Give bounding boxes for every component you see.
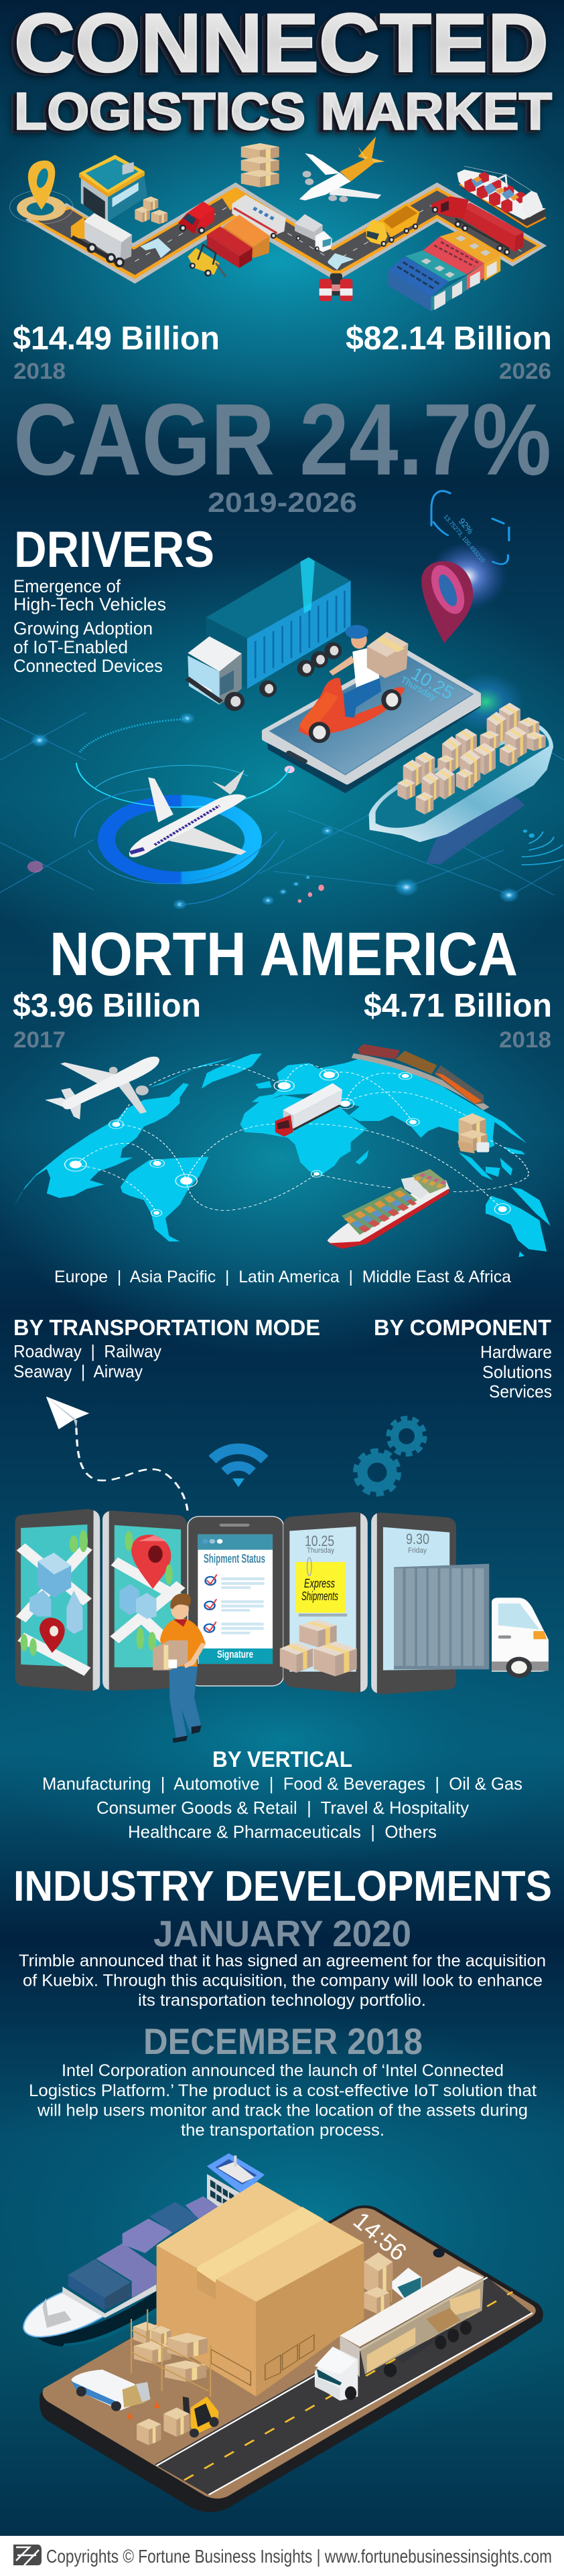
phone 3 status	[188, 1517, 283, 1686]
hud frame	[431, 491, 504, 564]
pallet of boxes	[241, 143, 279, 187]
drivers list: High-Tech Vehicles	[13, 594, 166, 614]
container truck	[187, 557, 351, 711]
development: January 2020: its transportation technology portfolio.	[138, 1991, 426, 2010]
boxes	[457, 1113, 489, 1153]
regions: Europe | Asia Pacific | Latin America | Middle East & Africa	[54, 1268, 511, 1286]
2026 value: 2026	[499, 359, 551, 384]
development: January 2020: Trimble announced that it has signed an agreement for the acquisition	[19, 1952, 546, 1970]
CAGR: 2019-2026	[208, 487, 357, 518]
delivery man	[153, 1594, 206, 1743]
phone 1 map	[15, 1509, 100, 1691]
segment: vertical: Consumer Goods & Retail | Travel & Hospitality	[96, 1798, 469, 1818]
hud frame: 13.75273, 100.493210	[442, 513, 486, 564]
north america values: 2017	[13, 1027, 66, 1053]
warehouse	[79, 155, 147, 222]
development: January 2020: of Kuebix. Through this acquisition, the company will look to enhance	[23, 1972, 543, 1990]
segment: component	[374, 1315, 552, 1401]
container ship	[328, 1169, 449, 1249]
drivers list: Connected Devices	[13, 656, 163, 676]
development: December 2018	[29, 2021, 537, 2140]
route hubs	[65, 1069, 510, 1216]
illustration: phones and delivery	[15, 1397, 549, 1743]
title	[14, 0, 552, 141]
forklift and boxes	[127, 2397, 218, 2445]
phone screen text: Shipments	[301, 1590, 338, 1603]
development: December 2018: Logistics Platform.’ The product is a cost-effective IoT solution that	[29, 2081, 537, 2100]
small truck behind	[392, 2267, 421, 2300]
title: LOGISTICS MARKET	[14, 82, 552, 141]
shelves and pallets	[131, 2253, 393, 2397]
development: January 2020: JANUARY 2020	[153, 1913, 411, 1954]
segment: transportation mode	[13, 1315, 320, 1381]
development: January 2020	[19, 1913, 546, 2010]
world map	[13, 1044, 551, 1257]
plane	[45, 1057, 159, 1120]
big parcel	[157, 2182, 364, 2397]
chevron	[140, 238, 171, 258]
paper plane	[46, 1397, 89, 1430]
2026 value: $82.14 Billion	[346, 321, 552, 357]
dashed route	[76, 1428, 188, 1513]
red semi truck	[431, 196, 524, 256]
drivers heading: DRIVERS	[14, 521, 214, 578]
illustration: connected transport	[0, 491, 564, 910]
cargo ship	[457, 166, 546, 229]
semi truck	[315, 2266, 484, 2401]
scooter rider	[299, 625, 408, 743]
grey truck	[71, 213, 132, 267]
drivers list	[13, 576, 166, 676]
phone screen text: 9.30	[406, 1531, 429, 1547]
phone screen text: Signature	[217, 1649, 253, 1660]
segment: transportation mode: Seaway | Airway	[13, 1361, 143, 1381]
hud frame: 92%	[457, 516, 476, 536]
development: December 2018: the transportation process.	[181, 2121, 384, 2140]
phone 5	[371, 1513, 456, 1695]
icon: location pin	[9, 161, 73, 224]
phone with scooter	[265, 652, 480, 793]
parcels	[280, 1620, 357, 1677]
train	[352, 1044, 486, 1109]
green glow	[448, 673, 523, 731]
phone screen text: Thursday	[307, 1547, 334, 1555]
phone 4 note	[283, 1512, 368, 1693]
phone screen text	[204, 1531, 429, 1660]
segment: vertical: BY VERTICAL	[212, 1747, 352, 1772]
drivers list: Growing Adoption	[13, 618, 153, 638]
orange container	[223, 215, 270, 258]
grey delivery truck	[295, 214, 332, 252]
north america values	[13, 988, 552, 1053]
2018 value: 2018	[13, 359, 66, 384]
hud brackets	[433, 522, 509, 564]
development: December 2018: will help users monitor and track the location of the assets during	[37, 2101, 528, 2120]
segment: vertical: Healthcare & Pharmaceuticals | Others	[128, 1822, 437, 1842]
icon: gears	[356, 1419, 424, 1493]
warehouses row	[388, 231, 500, 311]
route lines	[76, 1065, 528, 1213]
segment: vertical	[42, 1747, 522, 1842]
cargo ship	[23, 2153, 265, 2346]
phone screen text: Shipment Status	[204, 1552, 265, 1565]
delivery van	[71, 2370, 150, 2411]
segment: transportation mode: BY TRANSPORTATION MODE	[13, 1315, 320, 1340]
boxes near warehouse	[135, 197, 167, 224]
truck	[275, 1083, 342, 1136]
north america heading: NORTH AMERICA	[50, 920, 518, 989]
north america values: $3.96 Billion	[13, 988, 201, 1024]
road	[155, 2276, 533, 2495]
delivery truck	[394, 1563, 549, 1678]
cargo ship of boxes	[369, 703, 553, 865]
segment: component: Services	[489, 1381, 552, 1401]
segment: vertical: Manufacturing | Automotive | Food & Beverages | Oil & Gas	[42, 1774, 522, 1794]
phone screen text: Express	[304, 1577, 335, 1590]
segment: transportation mode: Roadway | Railway	[13, 1341, 161, 1361]
wifi arcs	[522, 829, 564, 865]
illustration: isometric logistics road	[9, 137, 547, 311]
chevron	[328, 253, 354, 270]
dump truck	[366, 203, 420, 247]
phone body	[40, 2205, 543, 2512]
barrels	[320, 273, 352, 301]
continents	[13, 1053, 551, 1257]
tanker truck	[221, 188, 286, 239]
logo	[13, 2545, 42, 2565]
drivers list: of IoT-Enabled	[13, 637, 128, 657]
title: CONNECTED	[14, 0, 549, 90]
2026 value	[346, 321, 552, 384]
2018 value: $14.49 Billion	[13, 321, 220, 357]
development: December 2018: Intel Corporation announced the launch of ‘Intel Connected	[62, 2061, 504, 2080]
phone screen text: Friday	[408, 1547, 427, 1555]
development: December 2018: DECEMBER 2018	[143, 2021, 423, 2062]
2018 value	[13, 321, 220, 384]
plane	[299, 137, 385, 202]
illustration: smartphone warehouse	[23, 2153, 543, 2512]
road	[25, 183, 547, 284]
north america values: $4.71 Billion	[364, 988, 552, 1024]
stars	[27, 713, 519, 910]
drivers list: Emergence of	[13, 576, 121, 596]
forklift	[188, 245, 226, 277]
phone clock: Thursday	[399, 674, 438, 703]
plane on target ring	[75, 719, 289, 904]
red van	[178, 201, 215, 234]
location pin glow	[421, 542, 507, 643]
segment: component: BY COMPONENT	[374, 1315, 551, 1340]
segment: component: Solutions	[482, 1362, 552, 1382]
network lines	[0, 713, 564, 895]
segment: component: Hardware	[480, 1342, 552, 1362]
market values	[13, 321, 552, 384]
red container	[207, 226, 253, 268]
phone clock: 10.25	[408, 663, 457, 703]
footer	[0, 2536, 564, 2576]
icon: wifi	[212, 1449, 265, 1487]
north america values: 2018	[499, 1027, 551, 1053]
phone 2 map with pin	[102, 1511, 187, 1691]
phone screen text: 10.25	[305, 1533, 334, 1549]
phone clock: 14:56	[348, 2207, 412, 2266]
